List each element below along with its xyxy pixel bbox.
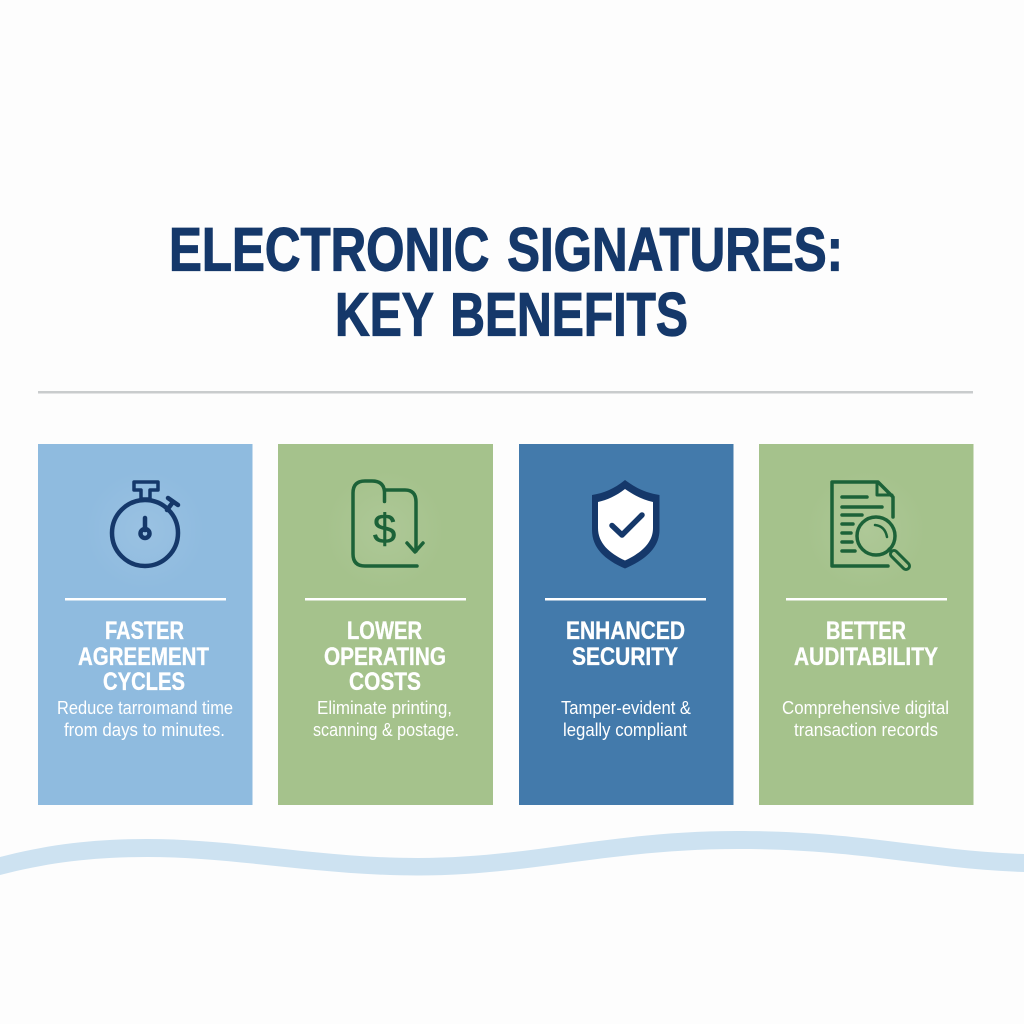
heading (794, 617, 938, 671)
title (169, 216, 843, 350)
heading: FASTER (105, 617, 184, 645)
description (782, 698, 949, 740)
panel: enhanced security (519, 444, 734, 805)
heading: ENHANCED (566, 617, 685, 645)
description: Tamper-evident & (561, 698, 691, 718)
description: scanning & postage. (313, 720, 459, 740)
description (313, 698, 459, 740)
wave (0, 831, 1024, 876)
description (561, 698, 691, 740)
description: legally compliant (563, 720, 687, 740)
icon: stopwatch (112, 482, 178, 566)
panel: lower operating costs (278, 444, 493, 805)
description (57, 698, 233, 740)
title: ELECTRONIC SIGNATURES: (169, 216, 843, 284)
heading: SECURITY (572, 643, 678, 671)
icon: document with dollar and down arrow: $ (373, 505, 396, 552)
heading (566, 617, 685, 671)
panel: better auditability (759, 444, 974, 805)
heading (78, 617, 209, 696)
description: transaction records (794, 720, 938, 740)
description: Reduce tarroımand time (57, 698, 233, 718)
title: KEY BENEFITS (335, 280, 688, 350)
heading (324, 617, 446, 696)
heading: BETTER (826, 617, 906, 645)
icon: document with magnifier (832, 482, 906, 566)
panel: faster agreement cycles (38, 444, 252, 805)
heading: CYCLES (103, 668, 185, 696)
heading: COSTS (349, 668, 421, 696)
heading: AGREEMENT (78, 643, 209, 671)
description: Eliminate printing, (317, 698, 452, 718)
heading: OPERATING (324, 643, 446, 671)
icon: document with dollar and down arrow (353, 481, 423, 566)
heading: AUDITABILITY (794, 643, 938, 671)
icon: shield with check (592, 480, 660, 568)
description: Comprehensive digital (782, 698, 949, 718)
heading: LOWER (347, 617, 422, 645)
description: from days to minutes. (64, 720, 225, 740)
